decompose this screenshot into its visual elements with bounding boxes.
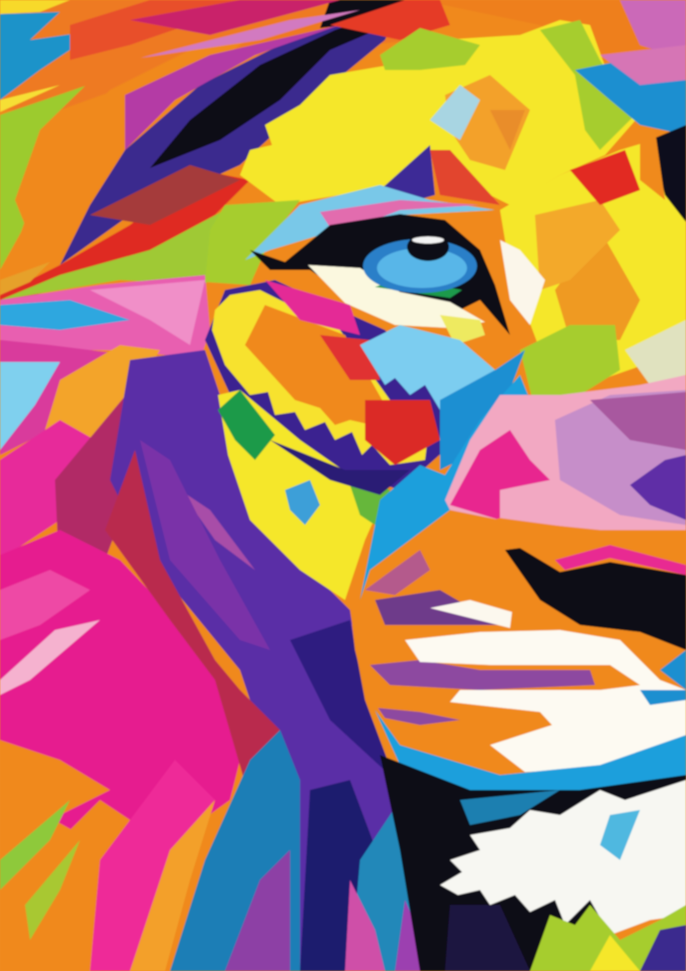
lion beard white [440, 780, 686, 971]
lion mouth [505, 548, 686, 650]
mane: magenta and red lower left [0, 450, 280, 971]
lion right face [500, 125, 686, 410]
lion jaw yellow [218, 390, 410, 600]
lion chin [375, 710, 686, 971]
lion muzzle [352, 518, 686, 785]
lion whiskers white [405, 630, 686, 772]
lion eye [250, 214, 510, 345]
mane: purple centre [110, 350, 440, 971]
mane: upper left [0, 0, 420, 305]
lion forehead [205, 0, 686, 285]
lion nose bridge [360, 375, 686, 600]
mane: left middle [0, 275, 210, 590]
mane: teal lower centre [170, 730, 445, 971]
lion cheek [205, 280, 525, 490]
